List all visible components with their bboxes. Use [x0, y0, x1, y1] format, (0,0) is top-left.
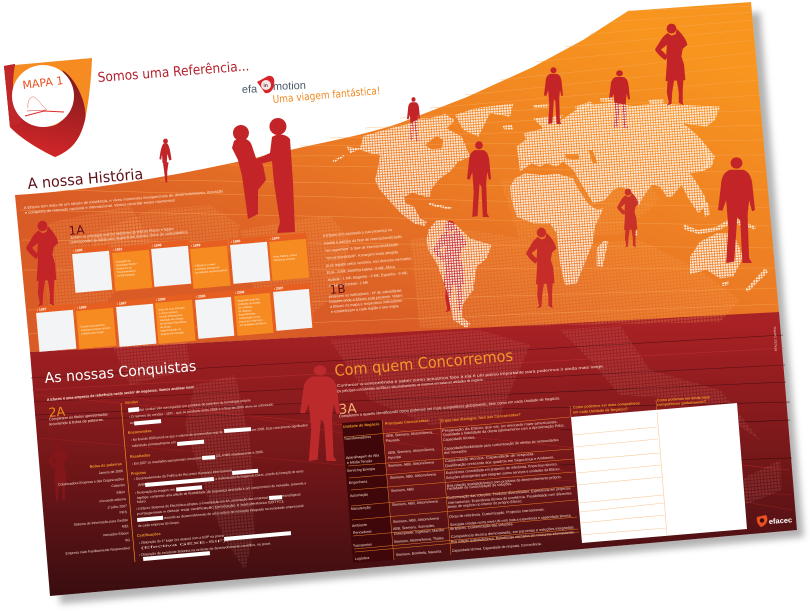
section 1B: 1B	[329, 282, 346, 297]
table headers: O que nos distingue, face aos Concorrentes?	[441, 413, 521, 423]
column: main competitors: Siemens, Bombela, Nacuhta	[396, 549, 441, 557]
card 2000: › 2000	[156, 297, 166, 302]
card 2006: de Unidades	[238, 305, 253, 310]
card 2000: de Serviços Específicos	[160, 320, 187, 326]
map: Alaska chain	[333, 155, 345, 162]
card 1997: › 1997	[117, 301, 127, 306]
text: internationalisation block: mundo e passou da fase de internacionalização	[324, 235, 402, 245]
column: differentiators: Qualidade e fiabilidade da oferta (alinhamento com a Aproximação Pólo).	[443, 423, 565, 437]
column: business units: Aparelhagem de Alta	[346, 453, 379, 460]
text: achievements with blanks: Certificações	[137, 532, 161, 538]
figure: woman shaking hands	[232, 125, 266, 219]
text: achievements with blanks: › Obtenção do 1º lugar (ex aequo) com a EDP na prova	[139, 534, 224, 545]
map: Eurasia	[517, 103, 720, 213]
column: main competitors: Siemens, ABB, Alstom/Areva	[392, 499, 438, 507]
map: Caribbean	[428, 203, 452, 209]
credit: vertical tiny text: EFACEC CAPITAL	[773, 326, 778, 351]
text: achievements with blanks: portuguesas e deixar esta certificação (produção e transferência EBTIC),	[137, 499, 285, 516]
panel: orange history background	[15, 2, 779, 352]
column: main competitors: Siemens, ABB, Alstom/Areva	[390, 472, 436, 480]
column: business units: Transportes	[353, 542, 372, 548]
card 2006: Unidades de Gestão	[238, 301, 261, 306]
card 1970: Fábrica de Arroteia.	[274, 257, 296, 262]
map: Japan	[702, 140, 715, 172]
text: internationalisation block	[323, 228, 412, 288]
card 2006: a Estratégia, novas	[239, 315, 261, 320]
logo badge: MAPA 1: MAPA 1	[22, 74, 64, 92]
column: differentiators	[442, 420, 575, 553]
section 1B: Analisem os indicadores - Nº de subsidiárias	[329, 289, 402, 299]
world map: Americas, dotted	[333, 114, 492, 328]
timeline row 1	[71, 233, 310, 293]
figure: woman off Africa	[526, 228, 556, 308]
column: main competitors: ABB, Siemens, Alstom/Areva,	[386, 430, 433, 438]
logo: efacec: efacec	[769, 515, 792, 526]
card 1959	[189, 240, 231, 289]
question headers above answer boxes: Como podemos ser ainda mais	[657, 395, 710, 402]
logo: efacec	[757, 515, 792, 527]
column: business unit block	[342, 420, 394, 563]
card 1997	[115, 298, 157, 347]
redaction bars	[128, 407, 291, 561]
figure: woman on phone, top right	[655, 24, 687, 105]
word bank list: MEL	[122, 524, 129, 529]
section 1A heading: Juntem os principais marcos históricos da vida da Efacec e façam	[70, 227, 174, 240]
column: differentiators: Soluções abrangentes que integram outros serviços e unidades da Efacec.	[446, 467, 561, 480]
card 2000: Implementação do	[160, 328, 182, 333]
section 2A: 2A	[48, 404, 66, 420]
card 2005	[194, 291, 236, 339]
column: business units: Engenharia	[349, 480, 367, 485]
column: differentiators: de Efacec. Customização das soluções.	[450, 522, 514, 531]
section 3A: 3A	[338, 401, 358, 418]
text: achievements with blanks: (21,4 M€) relativamente a 2006.	[216, 450, 264, 458]
card 1921: Fundação da	[116, 259, 131, 264]
question headers above answer boxes	[570, 395, 710, 417]
world map: Old World, dotted	[455, 97, 768, 292]
table: competitors	[342, 413, 579, 563]
text: internationalisation block: A Efacec tem apostado a sua presença no	[323, 228, 392, 238]
text: achievements with blanks	[125, 398, 308, 561]
text: achievements with blanks: Vendas	[125, 400, 138, 405]
card 2000	[154, 294, 197, 344]
text: internationalisation block: "em profundidade". A margem bruta atingida	[326, 250, 399, 260]
text: achievements with blanks: › Em 2007 os resultados operacionais cresceram	[132, 456, 202, 466]
map: Indonesia and islands	[683, 217, 757, 234]
text: achievements with blanks: das vendas são conseguidas por produtos de patentes ou tecnologia própria	[139, 398, 251, 412]
column: differentiators: Capacidade técnica.	[443, 435, 476, 442]
column: differentiators: Capacidade técnica. Capacidade de resposta.	[445, 452, 535, 463]
card 1990: › 1990	[77, 305, 87, 310]
column: differentiators: áreas de negócio no interior do próprio Efacec.	[448, 499, 523, 509]
section 2A: Completem os títulos apresentados	[49, 412, 108, 421]
card 1959: › 1959	[191, 243, 201, 248]
panel: dark red achievements background	[30, 312, 797, 596]
tagline: Uma viagem fantástica: Uma viagem fantástica!	[272, 85, 381, 106]
column: differentiators: Facilidade de customização de soluções.	[447, 482, 512, 491]
column: differentiators: Sinergias criadas numa nova UN com toda a experiência e capacidade técnica.	[450, 513, 572, 527]
faint map: red band	[110, 325, 782, 570]
figures standing behind the world map	[407, 70, 630, 312]
section 1A heading: 1A	[68, 223, 86, 238]
divider: achievements timeline	[121, 403, 135, 562]
text: achievements with blanks: › Desenvolvimento da Política de Recursos Humanos internacional	[134, 468, 232, 481]
text: competitors intro: Os principais concorrentes da Efacec são praticamente os mesmos em todas as unidades de negócio.	[337, 378, 484, 393]
text: competitors intro: Conhecer a concorrência e saber como actuamos face a ela é um passo importante para podermos ir ainda mais longe.	[337, 364, 604, 388]
card 2006: › 2006	[235, 290, 245, 295]
table grid lines	[344, 417, 579, 560]
word bank list: Colaboradora Empresa e das Organizações	[58, 477, 124, 487]
card 1966	[229, 236, 271, 284]
card 1970	[268, 233, 310, 281]
text: achievements with blanks: › Renovação da imagem, em	[135, 488, 175, 495]
text: achievements with blanks: › No final de 2008 prevê-se que o volume de encomendas seja de	[131, 430, 223, 442]
column: differentiators: Customização das soluções. Produtos diversificados. Experiência em projectos	[447, 486, 571, 500]
section 2A: recorrendo à bolsa de palavras.	[49, 418, 104, 426]
section 3A: Completem o quadro identificando como podemos ser mais competitivos globalmente, bem como em cada Unidade de Negócio.	[339, 396, 560, 418]
text: internationalisation block: EUA - 8 M€; América Latina - 9 M€; África	[327, 265, 396, 275]
card 2000: e novos serviços.	[159, 310, 179, 315]
logo: efa in motion: motion	[273, 80, 306, 93]
text: achievements with blanks: Encomendas	[128, 429, 152, 435]
column: differentiators: Capacidade/flexibilidade para customização de ofertas às necessidades	[444, 438, 559, 451]
text: achievements with blanks: › O número de vendas - 18% - que se produziu entre 2006 e o final de 2006 deve-se sobretudo	[129, 402, 274, 419]
column: main competitors: Siemens, ABB	[391, 487, 415, 493]
card 1990: a Efacec para longe!	[81, 331, 104, 336]
card 1921	[111, 244, 153, 292]
figure: man on Russia	[609, 70, 630, 128]
text: achievements with blanks: (Efectiva GEXE-SIF).	[141, 538, 229, 550]
card 1921: Transformadores	[117, 269, 137, 274]
text: achievements with blanks: , a modernização da imagem da Efacec, através da formação de novas	[214, 469, 304, 481]
card 1970: › 1970	[270, 236, 280, 241]
figure: small walking woman	[159, 139, 172, 183]
card 1959: A Efacec é a maior	[194, 263, 216, 268]
table headers: Unidade de Negócio	[343, 422, 380, 429]
map: New Zealand	[722, 268, 768, 292]
card 2000: Acordo internacional,	[159, 314, 183, 319]
text: achievements with blanks: em 2006. Este crescimento significativo	[252, 423, 308, 432]
card 1921: de Electricidade	[117, 273, 136, 278]
heading: Somos uma Referência: Somos uma Referência...	[97, 58, 250, 86]
text: achievements with blanks: visando ao desenvolvimento de uma cultura de inovação integrada na sociedade empresarial	[164, 504, 304, 520]
column: business units: Logística	[355, 556, 369, 561]
map: North America	[347, 114, 470, 226]
section 1B: e estabeleçam a cada região o seu mapa.	[331, 304, 400, 314]
text: internationalisation block: e Europa Central - 1 M€	[329, 281, 368, 288]
logo badge: MAPA 1	[4, 58, 92, 157]
column: main competitors: ABB, Siemens, Schneider,	[393, 524, 435, 531]
map: South America	[427, 220, 492, 328]
word bank list: Bolsa de palavras	[90, 462, 122, 469]
text: achievements with blanks: Resultados	[130, 453, 150, 459]
figure: woman in India	[617, 188, 639, 248]
text: competitors intro	[337, 364, 604, 393]
column: differentiators: dos mercados.	[444, 449, 468, 455]
text: achievements with blanks: Projetos	[131, 471, 146, 476]
map: Australia	[690, 233, 743, 278]
word bank list	[58, 462, 130, 556]
column: main competitors: ABB, Siemens, Alstom/Areva,	[388, 447, 435, 455]
text: internationalisation block: Austral - 1 M€; Magrebe - 9 M€; Espanha - 9 M€;	[328, 271, 408, 282]
text: conquistas intro: A Efacec é uma empresa de referência neste sector de negócios. Vamos analisar isso!	[47, 385, 195, 402]
figures standing above the map	[26, 24, 755, 502]
column: differentiators: Qualificação crescente dos quadros em Segurança e Ambiente.	[445, 455, 555, 468]
column: main competitors: Siemens, ABB, Alstom/Areva	[393, 516, 439, 524]
map: Madagascar	[597, 241, 608, 267]
card 1905: › 1905	[73, 248, 83, 253]
text: achievements with blanks: futuro.	[137, 499, 147, 504]
map: Philippines	[702, 200, 710, 217]
column: business units: Servicing Energia	[347, 467, 375, 473]
card 2000: de Grupo.	[160, 325, 172, 329]
word bank list: Janeiro de 2006	[99, 469, 123, 475]
card 1966: › 1966	[231, 239, 241, 244]
column: business units: e Média Tensão	[347, 459, 372, 465]
column: main competitors: Pauwels	[386, 438, 400, 443]
figure: man walking, Atlantic	[467, 141, 491, 217]
card 1921: Sociedade Electro-	[116, 262, 138, 267]
text: history intro: A Efacec tem mais de um século de existência, e viveu momentos inesquecíveis de desenvolvimento, inovação	[24, 189, 223, 210]
card 1948: › 1948	[152, 243, 162, 248]
card 1990: Criação das primeiras	[80, 323, 106, 329]
card 2006	[233, 287, 275, 336]
card 2006: em Unidades de Efacec.	[240, 322, 267, 327]
column: main competitors: Greenpower, Ingeteam, Martifer	[394, 528, 445, 536]
word bank list: Empresa mais Familiarmente Responsável	[65, 546, 130, 556]
text: history intro	[24, 189, 223, 215]
section 1A heading: corresponder as datas aos respectivos marcos (ficha de curiosidades).	[70, 230, 189, 244]
card 2006: Especializadas	[239, 312, 256, 317]
word bank list: Sistema de Informação para Gestão	[73, 518, 128, 527]
card 1990	[75, 302, 117, 350]
logo: efa in motion: in	[263, 83, 268, 89]
figure: man shaking hands	[254, 118, 295, 233]
text: achievements with blanks: tecnológicas	[282, 492, 301, 498]
column: differentiators: Boa relação qualidade/preço. Referências mercados em concursos internacionais.	[451, 530, 575, 544]
map: Greenland	[455, 103, 513, 137]
column: differentiators: Competência técnica demonstrada, em parcerias e soluções integradas.	[451, 525, 575, 539]
question headers above answer boxes: em cada Unidade de Negócio?	[573, 407, 629, 414]
card 2007	[272, 283, 314, 331]
card 1990: empresas próprias através	[81, 327, 111, 332]
text: achievements with blanks: › A Efacec Sistemas de Electrónica adoptou a Constituição em 4A, associação das empresas	[136, 495, 269, 511]
card 1959: sociedade portuguesa	[195, 266, 220, 271]
heading: A nossa História: A nossa História	[27, 165, 144, 193]
column: business units: Automação	[350, 493, 368, 498]
column: business units: Transformadores	[344, 435, 371, 441]
column: business units: Renováveis	[353, 530, 372, 535]
card 2000: Início de novo mercado	[159, 306, 185, 312]
figure: large man, Pacific	[718, 157, 755, 263]
column: main competitors	[386, 430, 445, 557]
column: differentiators: Obras de referência. Customização. Projectos internacionais.	[449, 507, 545, 519]
text: internationalisation block: já se reparte pelos vectores, nos diversos mercados:	[325, 256, 412, 268]
column: differentiators: internacionais. Experiência técnica de excelência. Possibilidade com diferentes	[448, 491, 572, 505]
heading: As nossas Conquistas: As nossas Conquistas	[44, 359, 197, 387]
card 1948	[150, 240, 192, 288]
timeline row 2	[35, 283, 314, 352]
column: business units: Manutenção	[351, 505, 371, 511]
map: Sri Lanka	[633, 230, 637, 235]
card 2007: › 2007	[274, 286, 284, 291]
card 1905	[71, 245, 113, 293]
question headers above answer boxes: competitivos globalmente?	[657, 400, 707, 407]
section 1B	[329, 282, 403, 314]
figure: man on North America	[407, 97, 420, 141]
heading: Com quem Concorremos: Com quem Concorremos	[334, 347, 514, 380]
text: history intro: e conquista de mercado nacional e internacional. Vamos recordar esses momentos!	[25, 198, 176, 215]
section 1A heading	[68, 223, 189, 244]
section 1B: a Efacec no mapa e respectivos indicadores	[330, 299, 402, 309]
column: main competitors: Siemens, Alstom/Areva, Thales	[394, 536, 444, 544]
word bank list: Colombo	[111, 483, 125, 488]
text: achievements with blanks: sobretudo principalmente em	[132, 440, 176, 448]
column: differentiators: Capacidade técnica. Capacidade de resposta. Concorrência.	[452, 542, 542, 553]
word bank list: 1º julho 2007	[107, 504, 127, 510]
card 1987	[35, 304, 77, 352]
text: achievements with blanks: logótipo, comportar uma atitude de flexibilidade, de segurança avançada e um compromisso de inovação, presente e	[137, 481, 307, 500]
column: differentiators: Experiência consolidada em projectos de referência, Know-how técnico.	[446, 462, 558, 475]
figure: man reading phone	[544, 67, 563, 124]
table headers: Principais Concorrentes	[385, 419, 429, 426]
card 2006: de Negócio,	[238, 309, 252, 313]
word bank list: mercados Efacec	[103, 531, 129, 537]
card 1921: › 1921	[113, 247, 123, 252]
word bank list: SG	[125, 538, 130, 542]
text: achievements with blanks: (MBPE)	[138, 482, 150, 487]
map: Africa	[510, 173, 603, 285]
text: achievements with blanks: de cada empresa do Grupo.	[138, 520, 180, 528]
logo: efa in motion	[242, 76, 306, 96]
answer boxes	[571, 403, 747, 543]
question headers above answer boxes: Como podemos ser mais competitivos	[573, 401, 640, 409]
section 1B: Cidades onde a Efacec está presente. Vejam	[329, 294, 403, 304]
card 1921: Moderna e do	[116, 266, 133, 271]
column: business units: Ambiente	[352, 523, 367, 528]
text: internationalisation block: "em superfície" à fase de internacionalização	[325, 243, 398, 253]
figure: man with hands in pockets	[300, 365, 340, 461]
card 2005: › 2005	[196, 294, 206, 299]
word bank list: Sábio	[116, 490, 125, 495]
column: main competitors: Hyundai	[388, 455, 401, 460]
figure: woman in South America	[433, 221, 466, 312]
figure: faint woman	[48, 442, 68, 502]
column: business units	[344, 435, 379, 561]
word bank list: microsoft-sistema	[99, 497, 126, 503]
logo: efa in motion: efa	[242, 83, 258, 96]
card 1987: › 1987	[37, 307, 47, 312]
card 2000: projecto de inovação	[161, 331, 185, 336]
column: main competitors: Siemens, ABB, Alstom/Areva	[388, 460, 434, 468]
word bank list: FIFS	[119, 510, 128, 515]
column: differentiators: Boa relação qualidade/preço com produtos de desenvolvimento próprio.	[447, 475, 562, 488]
column: differentiators: Preparação da Efacec que vai, no mercado mais-americanas.	[442, 420, 558, 433]
icon: route swoosh	[25, 97, 64, 116]
text: achievements with blanks: ao	[130, 421, 134, 425]
table headers	[343, 413, 521, 429]
figure: woman with phone, left	[26, 221, 58, 306]
card 1959: na indústria electromecânica.	[195, 269, 228, 275]
map: Iceland	[503, 125, 513, 129]
card 2000: Aquisição de unidade	[160, 317, 184, 322]
map: Svalbard and Arctic islands	[533, 97, 663, 112]
text: achievements with blanks: › Obtenção de excelente Bolonha na vertente de desenvolvimento científico, na prova	[139, 541, 271, 557]
card 2006: presença e liderança	[239, 319, 263, 324]
section 2A	[48, 404, 108, 426]
faint map: orange band	[40, 170, 740, 328]
card 2006: Integração total das	[237, 298, 260, 303]
card 1970: Nova Fábrica e Nova	[273, 254, 298, 259]
